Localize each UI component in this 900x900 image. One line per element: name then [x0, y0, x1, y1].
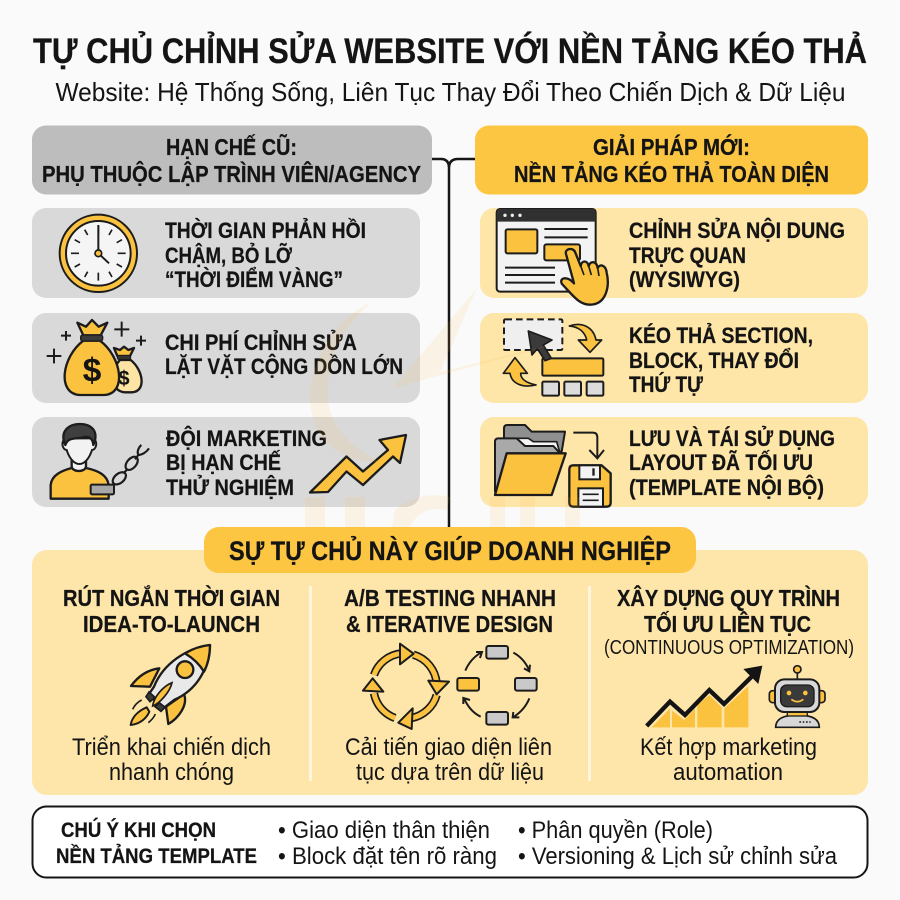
- notes list: • Versioning & Lịch sử chỉnh sửa: [518, 843, 838, 870]
- icon: rocket: [131, 645, 210, 725]
- icon: clock: [60, 215, 137, 292]
- column: A/B testing: & ITERATIVE DESIGN: [346, 611, 553, 637]
- card text: [165, 218, 366, 292]
- column: idea to launch: IDEA-TO-LAUNCH: [83, 611, 260, 637]
- notes list: • Block đặt tên rõ ràng: [278, 843, 497, 870]
- icon: growth chart: [647, 666, 762, 727]
- card text: THỨ TỰ: [629, 372, 703, 397]
- card text: [629, 323, 813, 397]
- card text: LẶT VẶT CỘNG DỒN LỚN: [165, 354, 403, 379]
- card text: [165, 330, 403, 379]
- subtitle: Website: Hệ Thống Sống, Liên Tục Thay Đổi Theo Chiến Dịch & Dữ Liệu: [56, 77, 846, 107]
- icon: money bags: $: [83, 353, 102, 390]
- icon: chained person: [51, 424, 149, 499]
- panel: old limitations header: HẠN CHẾ CŨ:: [166, 133, 297, 160]
- card text: BLOCK, THAY ĐỔI: [629, 348, 799, 373]
- icon: money bags: [47, 320, 146, 395]
- column: A/B testing: Cải tiến giao diện liên: [345, 734, 552, 761]
- icon: browser and hand: [497, 209, 608, 305]
- panel: old limitations header: PHỤ THUỘC LẬP TRÌNH VIÊN/AGENCY: [42, 160, 421, 187]
- column: continuous optimization: (CONTINUOUS OPTIMIZATION): [604, 636, 854, 659]
- connector lines between the two columns and the summary: [432, 159, 475, 527]
- card text: THỬ NGHIỆM: [166, 475, 294, 500]
- panel: cost card: [32, 313, 420, 403]
- panel: old limitations header: [32, 126, 432, 194]
- panel: business benefits: [32, 527, 868, 795]
- panel: drag and drop card: [480, 313, 868, 403]
- panel: slow response card: [32, 208, 420, 298]
- column: continuous optimization: [604, 584, 854, 786]
- card text: CHỈNH SỬA NỘI DUNG: [629, 218, 845, 243]
- icon: circular arrows: [363, 644, 449, 729]
- icon: folder and floppy disk: [495, 425, 611, 507]
- card text: TRỰC QUAN: [629, 243, 746, 268]
- icon: rising arrow: [310, 435, 406, 492]
- column: idea to launch: RÚT NGẮN THỜI GIAN: [63, 584, 280, 611]
- card text: “THỜI ĐIỂM VÀNG”: [165, 267, 343, 292]
- card text: (WYSIWYG): [629, 267, 740, 292]
- card text: CHI PHÍ CHỈNH SỬA: [165, 330, 357, 355]
- card text: LƯU VÀ TÁI SỬ DỤNG: [629, 426, 835, 451]
- panel: new solution header: NỀN TẢNG KÉO THẢ TOÀN DIỆN: [514, 159, 829, 187]
- notes heading: CHÚ Ý KHI CHỌN: [61, 817, 216, 842]
- icon: robot: [769, 666, 825, 727]
- card text: [629, 426, 835, 500]
- column: continuous optimization: Kết hợp marketing: [640, 734, 817, 761]
- column: idea to launch: Triển khai chiến dịch: [72, 734, 271, 761]
- icon: block flow: [457, 646, 537, 725]
- notes list: [278, 817, 838, 870]
- panel: new solution header: [475, 126, 868, 194]
- column: idea to launch: nhanh chóng: [109, 759, 234, 786]
- card text: LAYOUT ĐÃ TỐI ƯU: [629, 449, 813, 475]
- panel: reusable layout card: [480, 417, 868, 507]
- column: continuous optimization: automation: [673, 759, 783, 786]
- card text: ĐỘI MARKETING: [166, 426, 327, 451]
- card text: KÉO THẢ SECTION,: [629, 323, 813, 348]
- column: continuous optimization: TỐI ƯU LIÊN TỤC: [644, 610, 811, 637]
- notes heading: [56, 817, 257, 868]
- notes list: • Giao diện thân thiện: [278, 817, 490, 844]
- panel: marketing team card: [32, 417, 420, 507]
- icon: drag and drop blocks: [503, 319, 603, 396]
- card text: BỊ HẠN CHẾ: [166, 450, 281, 475]
- card text: [166, 426, 327, 500]
- icon: money bags: $: [118, 368, 130, 390]
- panel: new solution header: GIẢI PHÁP MỚI:: [593, 132, 750, 160]
- notes heading: NỀN TẢNG TEMPLATE: [56, 843, 257, 868]
- column: idea to launch: [63, 584, 280, 786]
- benefits heading pill: [204, 527, 696, 573]
- column: A/B testing: [344, 585, 556, 786]
- column: continuous optimization: XÂY DỰNG QUY TRÌNH: [617, 584, 840, 611]
- faint watermark logo overlay: [305, 288, 590, 527]
- card text: (TEMPLATE NỘI BỘ): [629, 475, 824, 500]
- column: A/B testing: A/B TESTING NHANH: [344, 585, 556, 611]
- card text: THỜI GIAN PHẢN HỒI: [165, 218, 366, 243]
- panel: template selection notes: [32, 806, 868, 878]
- card text: [629, 218, 845, 292]
- column: A/B testing: tục dựa trên dữ liệu: [356, 759, 544, 786]
- card text: CHẬM, BỎ LỠ: [165, 243, 293, 268]
- panel: WYSIWYG card: [480, 208, 868, 305]
- benefits heading pill: SỰ TỰ CHỦ NÀY GIÚP DOANH NGHIỆP: [229, 534, 671, 566]
- notes list: • Phân quyền (Role): [518, 817, 713, 844]
